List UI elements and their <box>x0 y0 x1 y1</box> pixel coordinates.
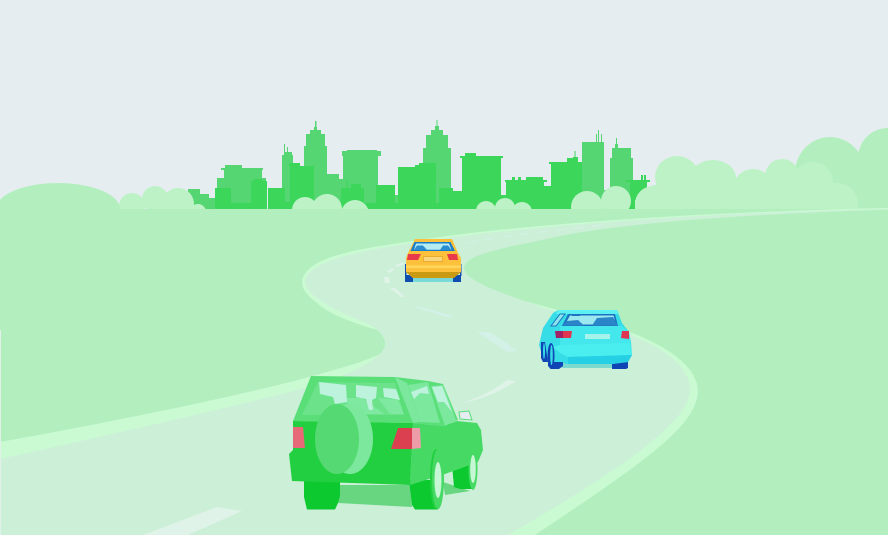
suv rear body <box>289 421 413 485</box>
back city skyline <box>188 120 634 209</box>
suv ground shadow <box>338 482 470 507</box>
large hills <box>0 128 888 235</box>
suv right rear wheel face <box>430 449 444 509</box>
road shoulder <box>0 208 888 535</box>
yellow car body <box>406 239 461 278</box>
yellow car shadow and wheels <box>405 264 462 282</box>
ground <box>0 209 888 535</box>
front city skyline <box>215 151 650 209</box>
teal car shadow and right wheel <box>562 360 628 369</box>
suv cabin <box>293 376 458 426</box>
green suv <box>289 376 483 510</box>
suv mirror <box>459 411 472 420</box>
road lane markings <box>143 225 603 535</box>
far background bushes <box>119 186 631 228</box>
teal car body <box>539 310 632 364</box>
suv left rear wheel <box>304 481 340 510</box>
road surface <box>0 209 888 535</box>
teal car <box>539 310 632 369</box>
suv right rear wheel tread <box>409 480 438 510</box>
right bush cluster <box>635 156 858 225</box>
yellow car <box>405 239 462 282</box>
suv tail lights <box>293 427 421 449</box>
suv spare wheel <box>315 404 373 474</box>
teal car left wheels <box>541 342 563 369</box>
suv far front wheel tread <box>452 465 473 489</box>
suv side body <box>410 421 483 485</box>
suv far front wheel face <box>468 448 478 490</box>
